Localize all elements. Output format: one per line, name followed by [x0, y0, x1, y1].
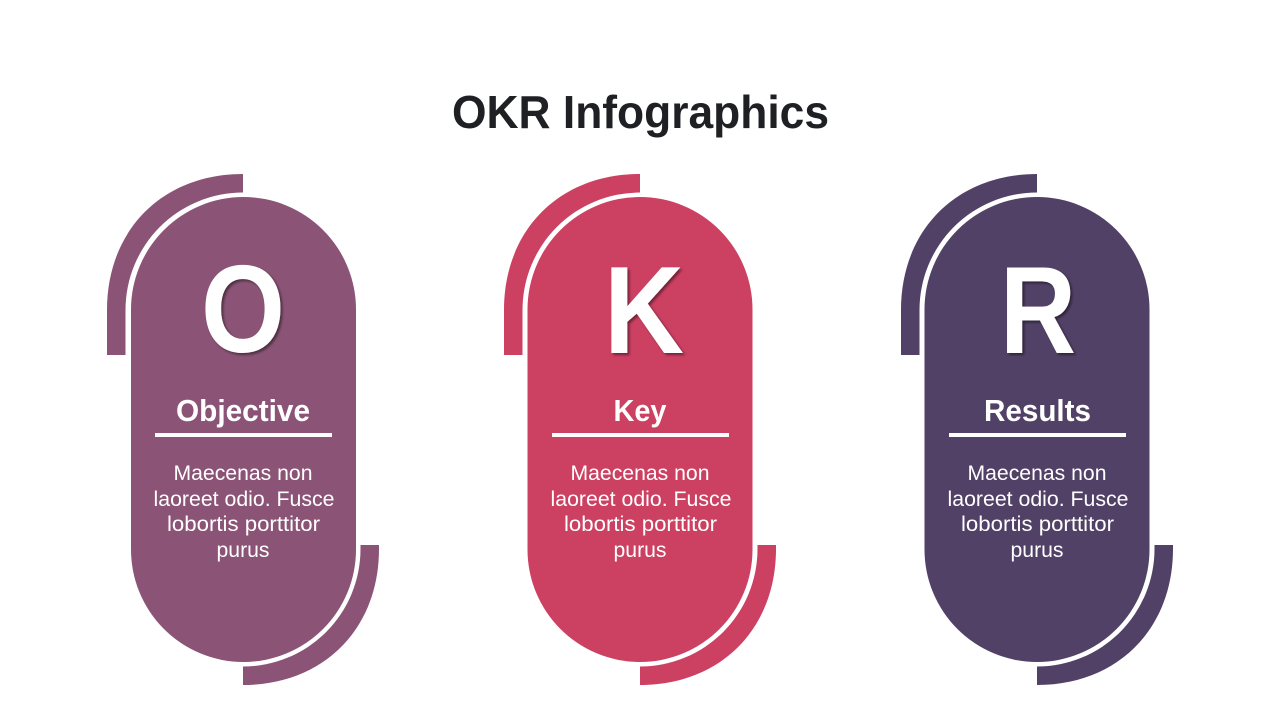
arc: results top-left	[901, 174, 1037, 355]
text: results description: laoreet odio. Fusce	[948, 488, 1128, 511]
title: OKR Infographics	[452, 86, 829, 138]
text: key description: laoreet odio. Fusce	[550, 488, 732, 511]
pill: results	[924, 197, 1150, 662]
pill: key	[528, 197, 752, 662]
arc: key bottom-right	[640, 545, 776, 685]
underline: objective	[155, 433, 332, 437]
arc: objective top-left	[107, 174, 243, 355]
heading: objective: Objective	[176, 393, 310, 428]
letter O: O	[201, 241, 285, 379]
text: key description: purus	[614, 539, 666, 562]
text: results description	[948, 462, 1128, 562]
text: key description: Maecenas non	[570, 462, 710, 485]
text: objective description: purus	[216, 539, 270, 562]
arc: results bottom-right	[1037, 545, 1173, 685]
heading: results: Results	[984, 393, 1091, 428]
text: objective description: lobortis porttitor	[167, 513, 320, 536]
underline: key	[552, 433, 729, 437]
text: objective description: Maecenas non	[174, 462, 312, 485]
text: objective description	[154, 462, 334, 562]
panel: objective	[107, 174, 379, 685]
pill: objective	[131, 197, 356, 662]
panel: key	[504, 174, 776, 685]
letter R: R	[1000, 242, 1076, 380]
underline: results	[949, 433, 1126, 437]
text: objective description: laoreet odio. Fusce	[154, 488, 334, 511]
text: results description: lobortis porttitor	[961, 513, 1114, 536]
arc: objective bottom-right	[243, 545, 379, 685]
text: results description: purus	[1010, 539, 1064, 562]
arc: key top-left	[504, 174, 640, 355]
text: results description: Maecenas non	[968, 462, 1106, 485]
text: key description	[550, 462, 732, 562]
text: key description: lobortis porttitor	[564, 513, 717, 536]
letter K: K	[604, 242, 684, 380]
panel: results	[901, 174, 1173, 685]
heading: key: Key	[614, 393, 667, 428]
